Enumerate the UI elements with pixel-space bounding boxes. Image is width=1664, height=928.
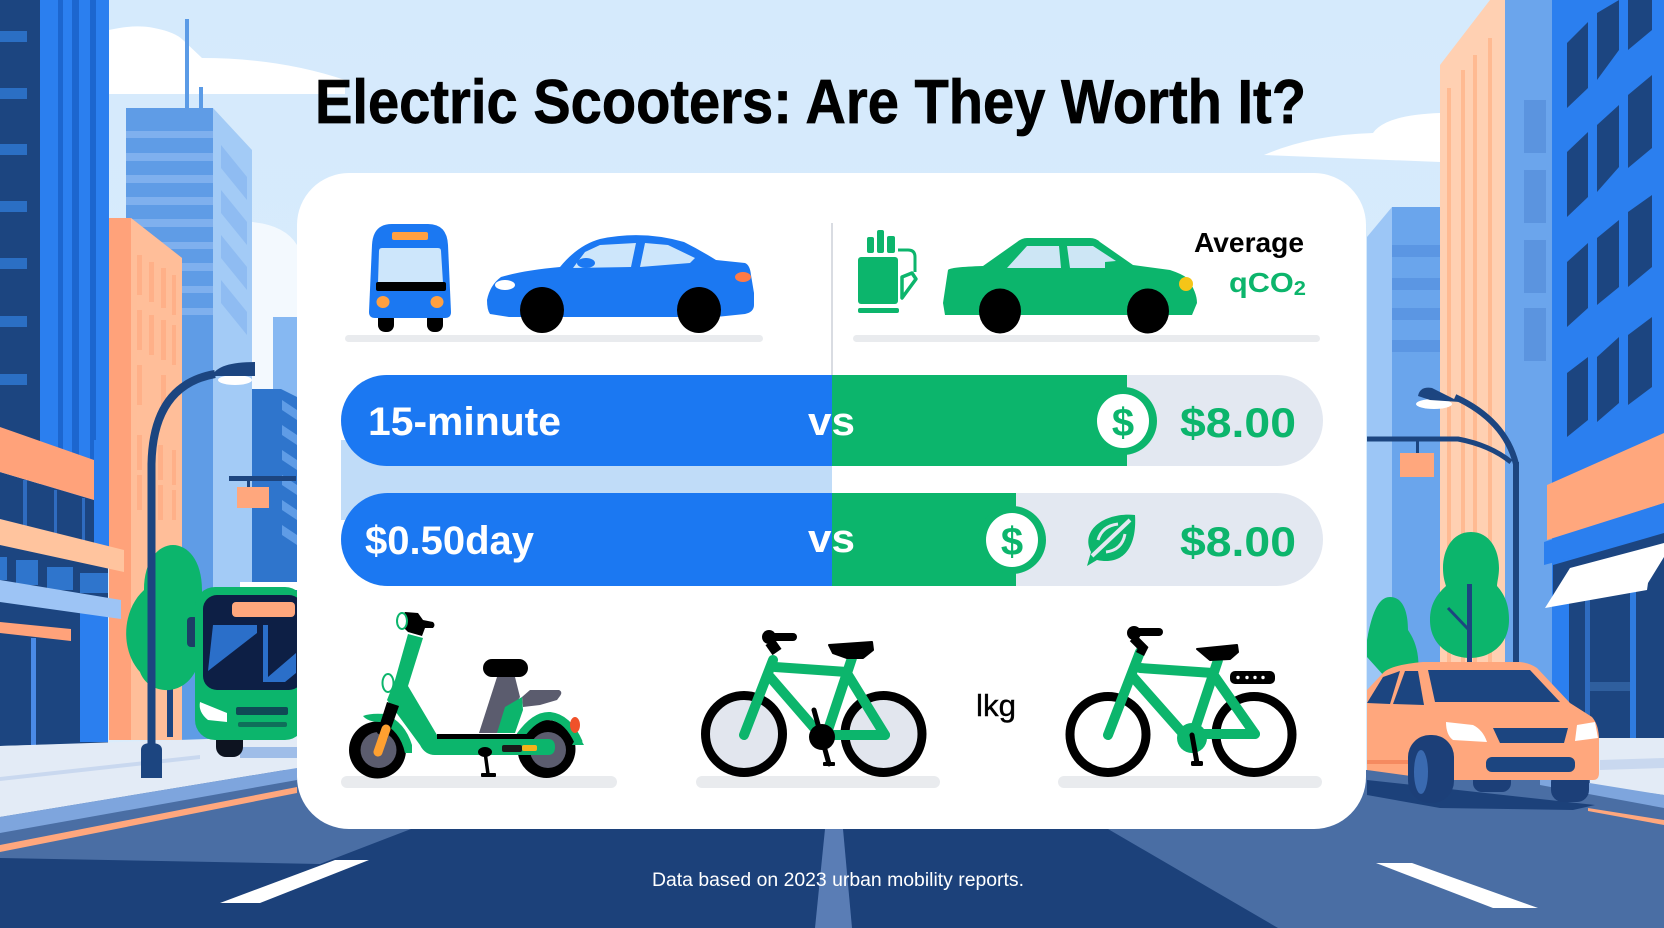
center divider: [831, 223, 833, 375]
comparison bar 1: $: [1112, 401, 1134, 445]
icon: electric scooter: [349, 612, 584, 778]
main white card: [297, 173, 1366, 829]
comparison bar 2: $8.00: [1180, 518, 1296, 565]
left tree: [126, 545, 202, 737]
comparison bar 1: vs: [808, 400, 855, 444]
icon: blue bus: [369, 224, 451, 332]
ground: bike two: [1058, 776, 1322, 788]
comparison bar 2: vs: [808, 517, 855, 561]
footnote: Data based on 2023 urban mobility reports.: [652, 870, 1024, 891]
background: road and sidewalks: [0, 736, 1664, 928]
right street lamp: [1367, 388, 1519, 662]
ground: scooter: [341, 776, 617, 788]
left green bus: [187, 582, 305, 757]
comparison bar 2: $: [1001, 520, 1023, 564]
comparison bar 1: [341, 375, 1323, 466]
icon: blue car: [487, 235, 754, 333]
label: CO2: qCO: [1229, 267, 1288, 298]
label: CO2: 2: [1294, 278, 1306, 300]
icon: green fuel pump: [858, 230, 916, 313]
ground line: left vehicles: [345, 335, 763, 342]
right orange car: [1367, 662, 1599, 803]
label: lkg: lkg: [976, 688, 1016, 723]
label: average: Average: [1194, 227, 1304, 258]
ground: bike one: [696, 776, 940, 788]
icon: bicycle one: [706, 630, 922, 772]
icon: bicycle two: [1070, 626, 1292, 772]
background: left buildings: [0, 0, 297, 746]
comparison bar 2: [341, 493, 1323, 586]
right trees: [1367, 532, 1509, 677]
icon: leaf: [1087, 515, 1135, 566]
background: right buildings: [1367, 0, 1664, 747]
background: clouds: [109, 26, 1440, 400]
ground line: right vehicles: [853, 335, 1320, 342]
comparison bar 2: $0.50day: [365, 519, 535, 563]
title: Electric Scooters: Are They Worth It?: [315, 68, 1306, 137]
comparison bar 1: $8.00: [1180, 399, 1296, 446]
icon: green car: [943, 238, 1197, 334]
comparison bar 1: 15-minute: [368, 400, 561, 444]
left street lamp: [141, 362, 296, 778]
light band between comparison bars: [341, 440, 832, 520]
